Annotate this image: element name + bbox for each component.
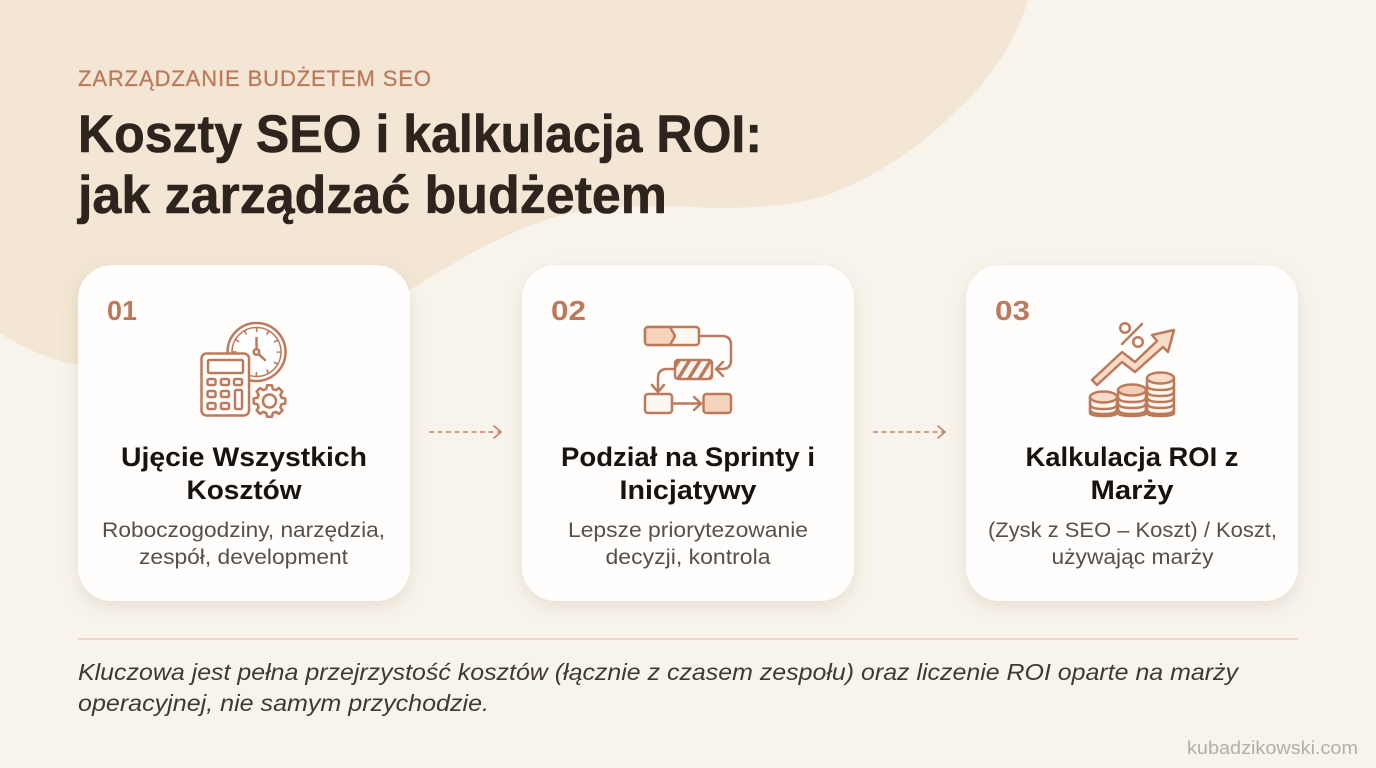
icon: sprint flow — [645, 327, 731, 413]
card 2 text: Lepsze priorytezowanie — [568, 519, 808, 542]
step number 02: 02 — [551, 295, 586, 326]
panel: card 2 — [522, 265, 854, 601]
takeaway text — [78, 659, 1239, 716]
step number 01: 01 — [107, 295, 137, 326]
card 1 heading: Ujęcie Wszystkich — [121, 442, 367, 472]
panel: card 1 — [78, 265, 410, 601]
panel: card 3 — [966, 265, 1298, 601]
card 3 text — [988, 519, 1277, 569]
card 2 heading: Podział na Sprinty i — [561, 442, 815, 472]
card 1 text: Roboczogodziny, narzędzia, — [102, 519, 385, 542]
decorative blob — [0, 0, 1028, 372]
title — [77, 105, 762, 225]
card 3 text: (Zysk z SEO – Koszt) / Koszt, — [988, 519, 1277, 542]
card 3 heading — [1026, 442, 1238, 505]
arrow 2 to 3 — [873, 426, 945, 438]
card 3 text: używając marży — [1052, 546, 1214, 569]
footer url: kubadzikowski.com — [1187, 738, 1358, 758]
icon: calculator, clock and gear — [202, 323, 286, 417]
eyebrow heading: ZARZĄDZANIE BUDŻETEM SEO — [78, 66, 431, 91]
card 1 heading — [121, 442, 367, 505]
card 2 text: decyzji, kontrola — [606, 546, 771, 569]
card 2 heading — [561, 442, 815, 505]
card 3 heading: Marży — [1090, 475, 1174, 505]
card 3 heading: Kalkulacja ROI z — [1026, 442, 1238, 472]
takeaway text: Kluczowa jest pełna przejrzystość kosztów (łącznie z czasem zespołu) oraz liczenie ROI oparte na marży — [78, 659, 1239, 685]
step number 03: 03 — [995, 295, 1030, 326]
card 1 text — [102, 519, 385, 569]
title: Koszty SEO i kalkulacja ROI: — [78, 105, 762, 164]
card 2 text — [568, 519, 808, 569]
title: jak zarządzać budżetem — [77, 166, 667, 225]
takeaway text: operacyjnej, nie samym przychodzie. — [78, 690, 489, 716]
card 2 heading: Inicjatywy — [620, 475, 756, 505]
icon: growth arrow, percent and coins — [1090, 323, 1174, 416]
divider — [78, 638, 1298, 640]
card 1 heading: Kosztów — [186, 475, 303, 505]
card 1 text: zespół, development — [139, 546, 348, 569]
arrow 1 to 2 — [429, 426, 501, 438]
